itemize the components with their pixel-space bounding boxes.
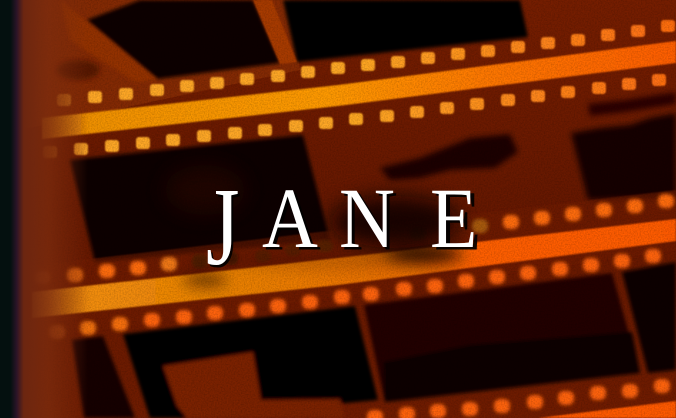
frame: bottom center shadow xyxy=(384,332,640,402)
frame divider top xyxy=(253,0,297,64)
film strip one: sprocket holes upper xyxy=(57,20,675,106)
frame: top center xyxy=(283,0,528,62)
letter A: A xyxy=(262,170,318,266)
frame: dark smudge middle right xyxy=(380,134,518,180)
frame: bottom center xyxy=(364,273,640,402)
faint red interior of middle frame xyxy=(165,165,245,215)
title: JANE xyxy=(206,164,481,291)
letter E: E xyxy=(430,170,477,266)
title shadow xyxy=(208,167,481,291)
film strip three: orange stripe xyxy=(538,401,676,418)
frame: bottom left xyxy=(123,306,378,418)
title shadow: E xyxy=(434,173,481,268)
film strip three: sprocket holes xyxy=(367,379,670,418)
lighter upper left film base xyxy=(20,0,300,130)
film strip two: base xyxy=(30,190,676,340)
frame: bottom right xyxy=(622,262,676,373)
frame: red patch in bottom frame xyxy=(163,352,345,418)
frame: dark smudge above right frame xyxy=(588,92,676,116)
shadow behind title on strip xyxy=(183,248,463,287)
title shadow: N xyxy=(342,173,398,268)
film strip one: orange stripe xyxy=(42,41,676,139)
film strip two: sprocket holes lower xyxy=(49,249,661,339)
letter N: N xyxy=(339,170,395,266)
film strip two: sprocket holes upper xyxy=(34,194,674,284)
frame: middle left xyxy=(70,135,330,262)
dark smudge upper left xyxy=(56,60,100,80)
left edge fade xyxy=(0,0,88,418)
film strip two: orange stripe xyxy=(32,219,676,318)
film strip one: sprocket holes lower xyxy=(43,74,666,158)
letter J: J xyxy=(206,164,239,289)
title shadow: J xyxy=(208,167,241,291)
frame: right xyxy=(571,113,676,200)
title shadow: A xyxy=(265,173,321,268)
frame divider left xyxy=(60,0,158,82)
dark haze behind title xyxy=(330,196,460,248)
frame: top left xyxy=(87,0,280,79)
frame: bottom left narrow dark xyxy=(72,336,135,418)
